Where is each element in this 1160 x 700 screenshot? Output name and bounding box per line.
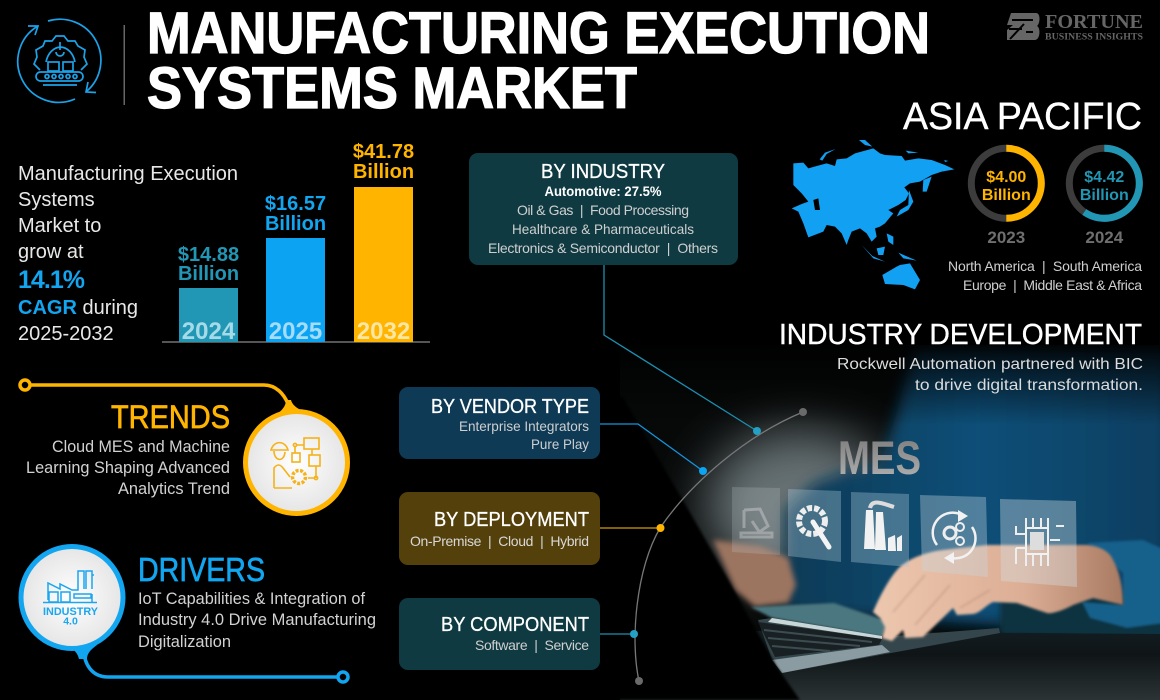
donut: 2024: 2024 bbox=[1085, 228, 1124, 247]
icon: Industry 4.0 factory: 4.0 bbox=[63, 616, 78, 628]
industry development: Rockwell Automation partnered with BIC bbox=[837, 356, 1143, 373]
tile: gear and wrench bbox=[788, 489, 841, 562]
tile: robot arm bbox=[732, 487, 780, 555]
regions list: Europe | Middle East & Africa bbox=[963, 277, 1142, 293]
panel: by vendor type: Pure Play bbox=[531, 436, 589, 452]
title: MANUFACTURING EXECUTION bbox=[147, 1, 930, 66]
description: Analytics Trend bbox=[118, 479, 230, 498]
tile: factory bbox=[851, 492, 909, 567]
map: Asia Pacific bbox=[792, 140, 954, 289]
icon: worker with checklist bbox=[271, 438, 320, 488]
panel: by industry bbox=[469, 153, 738, 265]
bar 2032 bbox=[353, 141, 414, 345]
bar 2025 bbox=[265, 193, 326, 345]
tile: process gears bbox=[920, 495, 988, 577]
panel: by deployment: BY DEPLOYMENT bbox=[434, 509, 589, 531]
logo: Fortune Business Insights: FORTUNE bbox=[1045, 11, 1143, 33]
donut: 2023: $4.00 bbox=[986, 169, 1026, 186]
icon: conveyor gear bbox=[18, 19, 101, 102]
connector lines and arc bbox=[600, 265, 807, 685]
bar 2032: Billion bbox=[353, 161, 414, 183]
left hand bbox=[713, 540, 796, 607]
regions list bbox=[948, 258, 1142, 293]
laptop base bbox=[758, 618, 1000, 673]
panel: by deployment: On-Premise | Cloud | Hybrid bbox=[410, 533, 589, 549]
tile: circuit chip bbox=[1000, 499, 1077, 587]
bar chart bbox=[162, 141, 430, 345]
bar 2024: $14.88 bbox=[178, 244, 239, 266]
panel: by component: BY COMPONENT bbox=[441, 614, 589, 636]
laptop screen wedge bbox=[620, 416, 800, 700]
title: SYSTEMS MARKET bbox=[147, 56, 637, 121]
icon: Industry 4.0 factory bbox=[43, 571, 99, 628]
panel: by component: Software | Service bbox=[475, 637, 589, 653]
industry development: INDUSTRY DEVELOPMENT bbox=[779, 319, 1142, 351]
CAGR text block: Market to bbox=[18, 215, 101, 237]
donut: 2024: Billion bbox=[1080, 187, 1129, 204]
description: Learning Shaping Advanced bbox=[26, 458, 230, 477]
industry development: to drive digital transformation. bbox=[915, 377, 1143, 394]
industry development bbox=[779, 319, 1143, 394]
shirt sleeve bbox=[1082, 540, 1160, 628]
heading: DRIVERS bbox=[138, 551, 265, 588]
bar 2024 bbox=[178, 244, 239, 345]
donut: 2024 bbox=[1069, 148, 1139, 247]
title bbox=[147, 1, 930, 121]
logo: Fortune Business Insights: BUSINESS INSIGHTS bbox=[1045, 32, 1143, 42]
panel: by component bbox=[399, 598, 600, 670]
donut: 2023 bbox=[971, 148, 1041, 247]
CAGR text block: CAGR during bbox=[18, 297, 138, 319]
CAGR text block: Systems bbox=[18, 189, 95, 211]
bar 2025: Billion bbox=[265, 213, 326, 235]
heading: TRENDS bbox=[111, 399, 230, 435]
header divider bbox=[124, 25, 125, 105]
panel: by vendor type bbox=[399, 387, 600, 459]
photo: person using laptop with MES overlay bbox=[600, 345, 1160, 700]
right hand bbox=[873, 545, 1123, 641]
bar 2025: 2025 bbox=[269, 318, 322, 345]
MES label: MES bbox=[838, 431, 921, 484]
panel: by industry: Healthcare & Pharmaceuticals bbox=[512, 221, 694, 237]
bar 2025: $16.57 bbox=[265, 193, 326, 215]
panel: by vendor type: BY VENDOR TYPE bbox=[431, 396, 589, 418]
description: Industry 4.0 Drive Manufacturing bbox=[138, 610, 376, 629]
donut: 2023: Billion bbox=[982, 187, 1031, 204]
laptop surface bbox=[751, 603, 890, 637]
CAGR text block: 2025-2032 bbox=[18, 323, 114, 345]
panel: by industry: Automotive: 27.5% bbox=[544, 183, 662, 199]
description: IoT Capabilities & Integration of bbox=[138, 589, 365, 608]
description: Digitalization bbox=[138, 632, 231, 651]
panel: drivers bbox=[21, 546, 376, 682]
donut: 2023: 2023 bbox=[987, 228, 1025, 247]
bar 2024: 2024 bbox=[182, 318, 236, 345]
CAGR text block: grow at bbox=[18, 241, 84, 263]
panel: by industry: BY INDUSTRY bbox=[541, 161, 665, 183]
description bbox=[138, 589, 376, 651]
heading: Asia Pacific: ASIA PACIFIC bbox=[903, 96, 1142, 138]
bar 2032: 2032 bbox=[357, 318, 410, 345]
logo: Fortune Business Insights bbox=[1007, 11, 1143, 42]
panel: by industry: Electronics & Semiconductor | Others bbox=[488, 240, 718, 256]
description: Cloud MES and Machine bbox=[52, 437, 230, 456]
icon: Industry 4.0 factory: INDUSTRY bbox=[43, 606, 99, 618]
CAGR text block: 14.1% bbox=[18, 266, 85, 294]
panel: by deployment bbox=[399, 492, 600, 565]
CAGR text block: Manufacturing Execution bbox=[18, 163, 238, 185]
CAGR text block bbox=[18, 163, 238, 345]
bar 2032: $41.78 bbox=[353, 141, 414, 163]
donut: 2024: $4.42 bbox=[1084, 169, 1124, 186]
description bbox=[26, 437, 230, 498]
regions list: North America | South America bbox=[948, 258, 1142, 274]
bar 2024: Billion bbox=[178, 263, 239, 285]
panel: by industry: Oil & Gas | Food Processing bbox=[517, 202, 689, 218]
panel: by vendor type: Enterprise Integrators bbox=[459, 418, 589, 434]
panel: trends bbox=[20, 380, 348, 514]
